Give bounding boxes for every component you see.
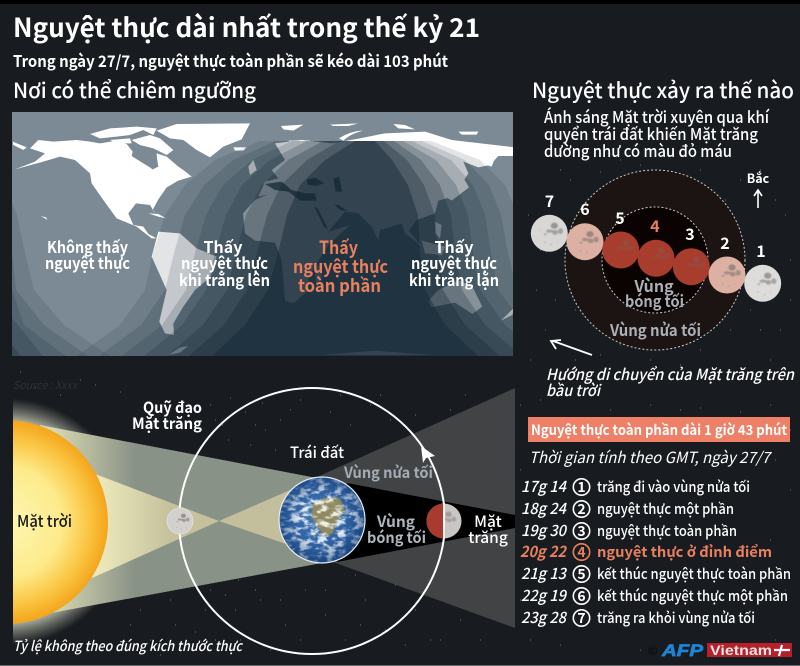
logo: Vietnam+: Vietnam [710,642,772,658]
map label: moonset: Thấy [435,234,473,258]
moon numbers [545,188,766,262]
logo: AFP: AFP [661,641,704,660]
timeline note: Thời gian tính theo GMT, ngày 27/7 [529,446,772,468]
moon orbit [179,388,445,654]
row 2: 18g 24 [521,497,567,519]
row 1 [521,475,750,497]
row 7: 7 [577,608,586,628]
moon numbers: 2 [720,230,730,254]
moon 1 [744,265,781,302]
row 4 highlighted [520,540,772,562]
row 4 highlighted: 20g 22 [520,540,568,562]
map label: total eclipse [293,234,388,298]
map label: total eclipse: toàn phần [298,272,381,298]
label: moon: trăng [468,526,508,548]
row 4 highlighted: 4 [577,542,586,562]
moon 3 [673,248,710,285]
row 3 [521,519,737,541]
moon left [167,508,193,534]
moon numbers: 7 [545,188,554,212]
map label: moonset [409,234,499,291]
row 4 highlighted: nguyệt thực ở đỉnh điểm [597,541,772,562]
map label: moonset: khi trăng lặn [409,267,499,291]
scale note: Tỷ lệ không theo đúng kích thước thực [13,636,244,656]
explanation text [544,104,770,162]
moon 4 [638,240,674,277]
arrow: moon direction [551,340,592,355]
penumbra zone [565,170,745,350]
moon right half-eclipsed [426,503,462,539]
diagram: eclipse path through shadow [531,170,781,350]
moon 6 [566,223,604,260]
label: umbra: Vùng [376,510,415,532]
moon numbers: 5 [615,205,625,229]
right penumbra [317,388,515,628]
heading: how it happens: Nguyệt thực xảy ra thế nào [532,75,794,105]
map label: moonset: nguyệt thực [411,250,497,274]
continents: Eurasia, Africa, Oceania [243,123,515,355]
umbra [337,483,515,562]
orbit arrowhead [421,446,435,463]
row 7: trăng ra khỏi vùng nửa tối [597,607,755,628]
map label: no eclipse: nguyệt thực [45,250,130,274]
diagram: sun earth moon [0,388,515,656]
explanation text: dường như có màu đỏ máu [544,138,732,162]
label: umbra: Vùng [633,273,674,297]
label: moon orbit: Mặt trăng [132,412,202,434]
penumbra beam [40,425,333,615]
earth [279,477,365,563]
explanation text: quyển trái đất khiến Mặt trăng [544,121,758,145]
row 2: 2 [577,499,586,519]
row 3: 19g 30 [521,519,568,541]
moon 2 [708,256,746,294]
callout: totality duration: Nguyệt thực toàn phần dài 1 giờ 43 phút [531,420,787,440]
label: moon: Mặt [474,510,502,532]
map label: no eclipse: Không thấy [47,234,128,258]
label: umbra [625,273,684,312]
label: moon [468,510,508,548]
source note: Source : Xxxx [13,377,78,393]
row 2 [521,497,734,519]
row 6 [521,584,788,606]
panel: world visibility map [12,112,513,356]
row 6: 22g 19 [521,584,568,606]
moon numbers: 4 [650,213,660,237]
beige rays [92,474,219,578]
logo: Vietnam+ [707,642,792,658]
row 6: 6 [577,586,586,606]
map label: no eclipse [45,234,130,274]
visibility bands [78,141,513,356]
continents: Americas [13,123,250,355]
map label: moonrise: khi trăng lên [179,267,270,291]
moon 5 [602,232,639,268]
wrapped bands [12,204,110,356]
label: umbra: bóng tối [625,288,684,312]
row 5: 21g 13 [521,562,568,584]
row 1: 17g 14 [521,475,567,497]
inland seas [265,177,348,228]
umbra zone [602,207,708,313]
timeline list [520,475,791,628]
label: moon orbit: Quỹ đạo [143,396,202,418]
map label: total eclipse: nguyệt thực [293,253,388,279]
logo: AFP: © [648,642,658,659]
row 7 [521,606,755,628]
title: Nguyệt thực dài nhất trong thế kỷ 21 [13,8,480,45]
map label: moonrise [179,234,270,291]
row 1: trăng đi vào vùng nửa tối [597,476,750,497]
map label: moonrise: nguyệt thực [181,250,268,274]
row 5 [521,562,791,584]
sun halo [13,400,96,644]
map label: moonrise: Thấy [204,234,242,258]
subtitle: Trong ngày 27/7, nguyệt thực toàn phần sẽ kéo dài 103 phút [13,48,448,72]
moon numbers: 1 [756,238,766,262]
label: sun: Mặt trời [17,508,72,532]
sun [13,420,108,624]
label: umbra: bóng tối [367,526,426,548]
map label: total eclipse: Thấy [319,234,359,260]
heading: where to watch: Nơi có thể chiêm ngưỡng [13,75,256,105]
moon direction caption: bầu trời [546,379,602,401]
label: north: Bắc [747,168,770,187]
moon numbers: 3 [685,221,695,245]
row 5: 5 [577,564,586,584]
row 3: nguyệt thực toàn phần [597,520,737,541]
row 7: 23g 28 [521,606,568,628]
label: moon orbit [132,396,202,434]
arrow: north [754,190,762,208]
label: penumbra: Vùng nửa tối [609,317,701,341]
row 1: 1 [577,477,586,497]
label: penumbra: Vùng nửa tối [343,461,433,483]
row 3: 3 [577,521,586,541]
row 2: nguyệt thực một phần [597,498,734,519]
label: umbra [367,510,426,548]
label: earth: Trái đất [290,441,344,463]
explanation text: Ánh sáng Mặt trời xuyên qua khí [544,104,770,128]
moon numbers: 6 [580,196,590,220]
moon direction caption [546,363,795,401]
logo: AFP [648,641,704,660]
moon 7 [531,215,568,252]
